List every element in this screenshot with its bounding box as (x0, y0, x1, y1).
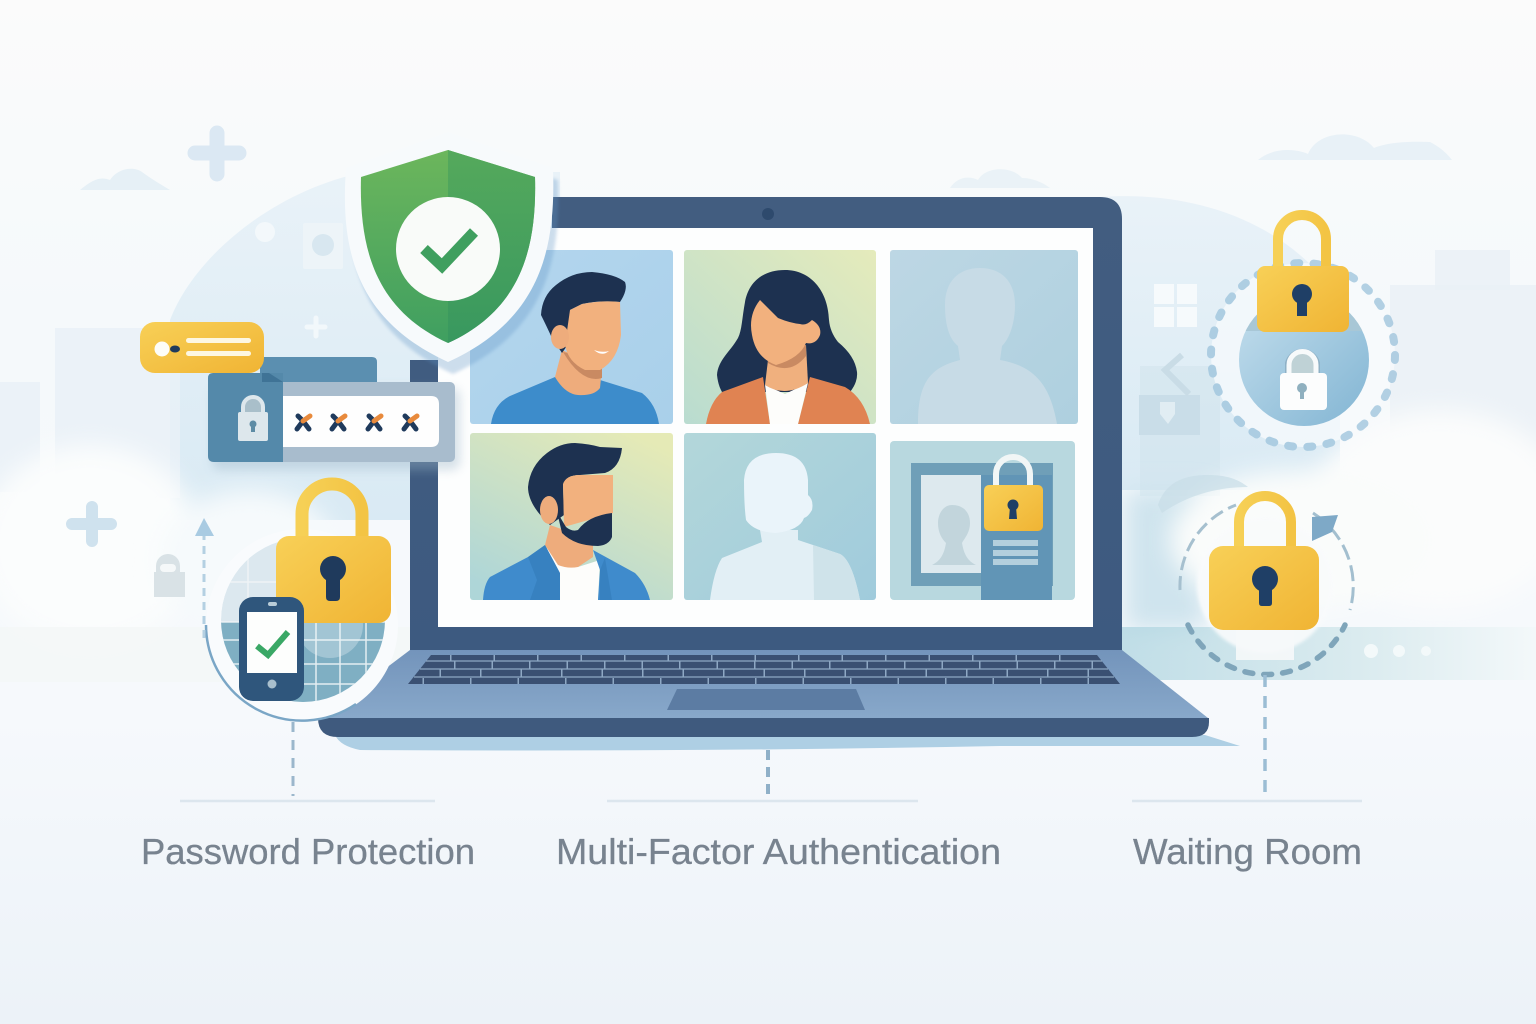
check circle (396, 197, 500, 301)
decoration: plus signs (72, 133, 325, 541)
keyboard (408, 655, 1120, 684)
icon: yellow lock (1257, 215, 1349, 332)
icon: card lock (984, 457, 1043, 531)
connector: password protection (180, 722, 435, 801)
tile: woman with long hair (684, 250, 876, 424)
label: waiting room: Waiting Room (1133, 831, 1362, 872)
trackpad (667, 689, 865, 710)
globe grid (221, 542, 385, 702)
laptop lid (410, 197, 1122, 650)
blue sphere (1239, 312, 1369, 426)
laptop (318, 197, 1240, 750)
icon: small white lock (1280, 352, 1327, 410)
decorative dots (1364, 644, 1431, 658)
connector: waiting room (1132, 675, 1362, 801)
panel: waiting room bottom lock (1180, 496, 1431, 674)
camera (762, 208, 774, 220)
white disc (206, 529, 398, 721)
laptop base (318, 650, 1209, 737)
icon: phone with check (239, 597, 304, 701)
connector: multi-factor authentication (607, 750, 918, 801)
decoration: background windows (154, 222, 1248, 597)
tile: man with short hair (470, 250, 673, 424)
password asterisks (297, 416, 417, 429)
label: password protection: Password Protection (141, 831, 475, 872)
yellow key pill (140, 322, 264, 373)
icon: faded lock (154, 554, 185, 597)
panel: multi-factor authentication (195, 484, 400, 721)
tile: silhouette 1 (890, 250, 1078, 424)
laptop shadow (335, 735, 1240, 750)
tile: locked ID card (890, 441, 1075, 600)
white halo (1197, 517, 1333, 653)
icon: padlock (276, 484, 391, 623)
upward arrow (195, 518, 214, 638)
panel: waiting room top lock (1211, 215, 1395, 447)
screen (438, 228, 1093, 627)
icon: yellow lock (1209, 496, 1319, 630)
shield badge (345, 132, 558, 374)
password field (208, 357, 460, 470)
panel: password protection (140, 322, 460, 470)
tile: man with beard (470, 433, 673, 600)
decoration: clouds (80, 134, 1452, 190)
dashed circle (1211, 263, 1395, 447)
tile: silhouette 2 (684, 433, 876, 600)
icon: lock (238, 397, 268, 441)
arrow head (1312, 515, 1338, 541)
label: multi-factor authentication: Multi-Factor Authentication (556, 831, 1001, 872)
dashed timer ring (1180, 505, 1353, 674)
